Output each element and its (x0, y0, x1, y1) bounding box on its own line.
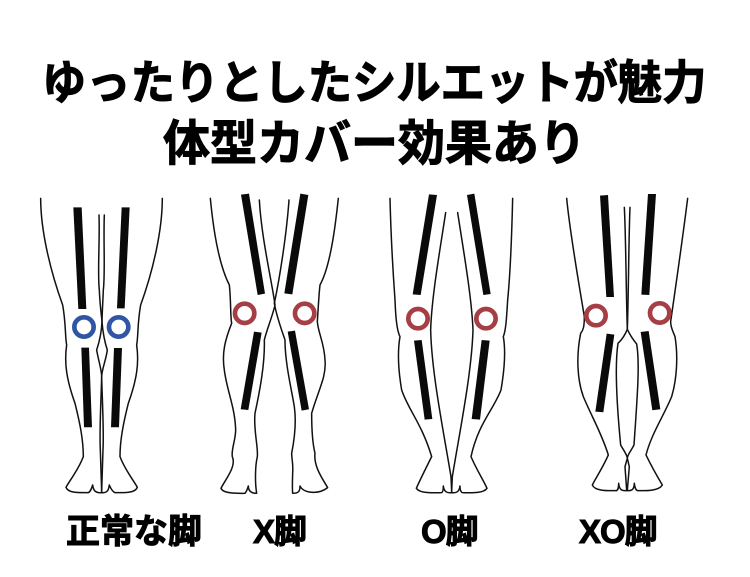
diagram: X legs (210, 194, 338, 493)
diagram: XO legs (567, 194, 688, 491)
diagram: O legs (390, 194, 513, 493)
title (42, 58, 706, 170)
diagram: normal legs (41, 198, 162, 493)
title line 2: 体型カバー効果あり (163, 116, 586, 170)
label: normal legs: 正常な脚 (66, 513, 202, 551)
label: X legs: X脚 (253, 513, 306, 550)
label: O legs: O脚 (421, 513, 478, 550)
title line 1: ゆったりとしたシルエットが魅力 (42, 58, 706, 109)
label: XO legs: XO脚 (579, 513, 657, 550)
